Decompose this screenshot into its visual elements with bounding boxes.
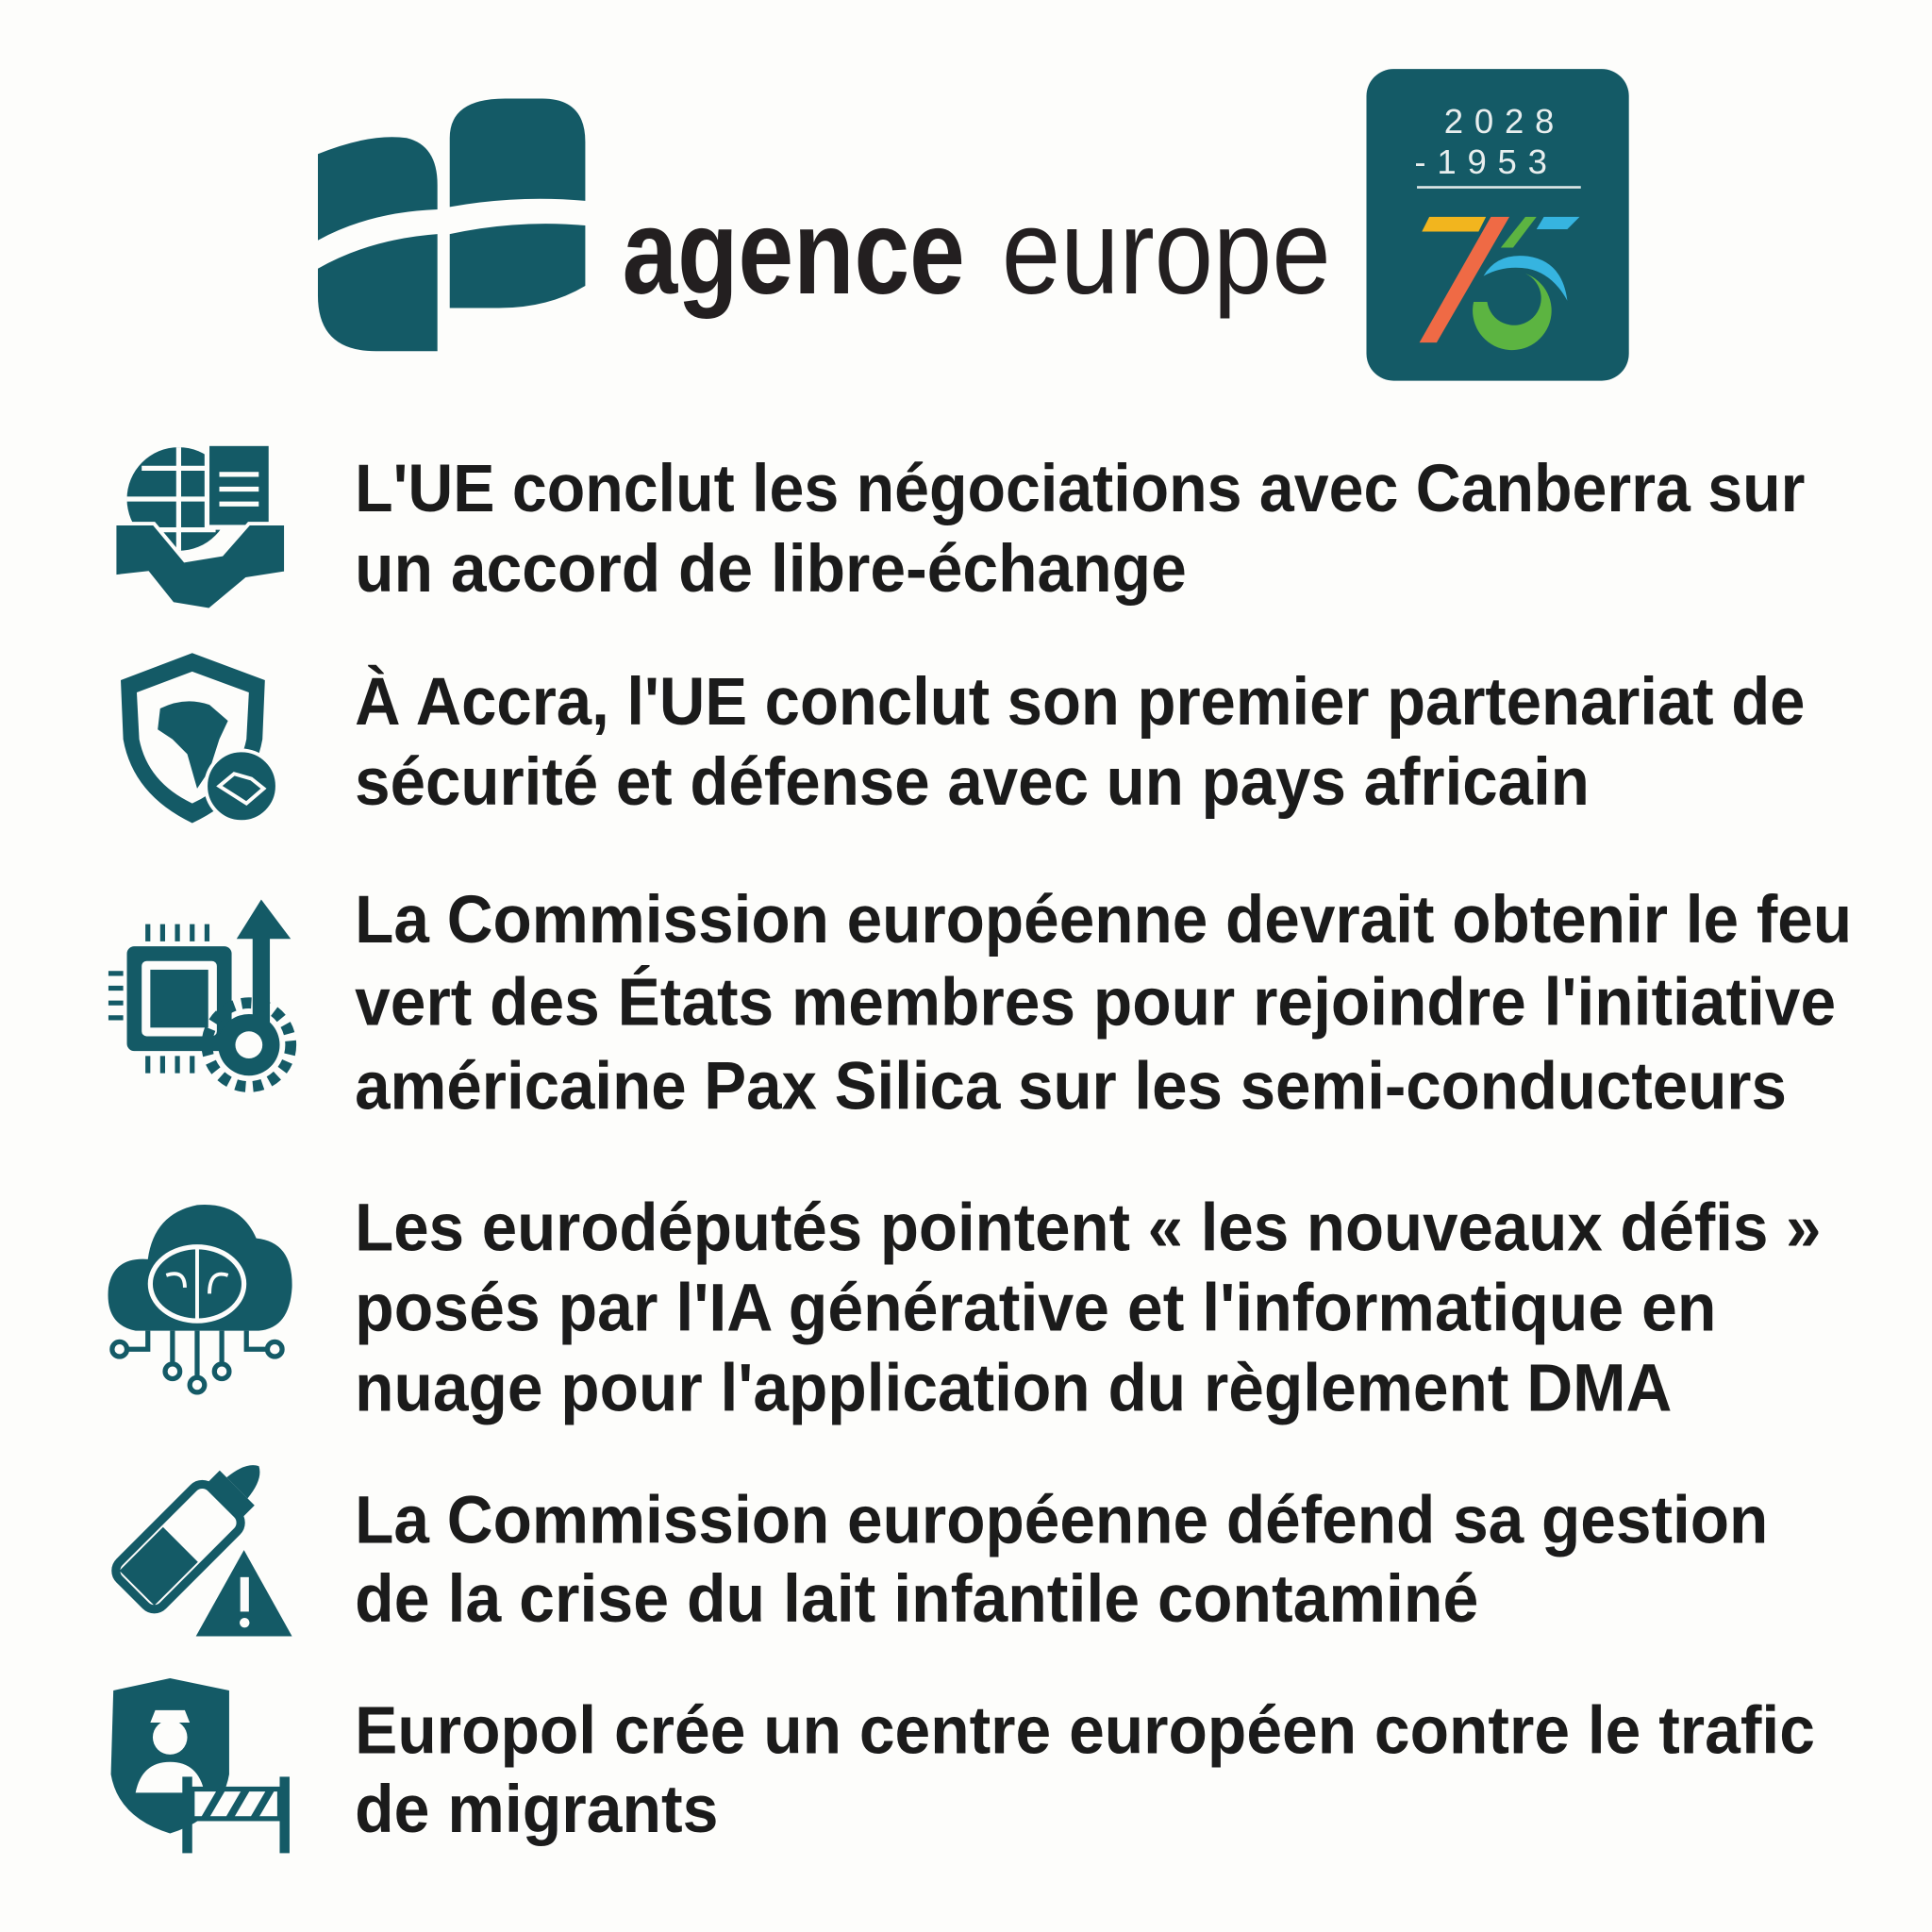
badge 75 years: 2028 (1444, 102, 1565, 141)
item 3 (108, 882, 1852, 1124)
headline 4: nuage pour l'application du règlement DMA (355, 1351, 1672, 1426)
badge 75 years: -1953 (1414, 142, 1558, 181)
item 5 (110, 1444, 1768, 1637)
headline 4: posés par l'IA générative et l'informatique en (355, 1271, 1716, 1346)
headline 5: La Commission européenne défend sa gestion (355, 1482, 1768, 1557)
logo wordmark: europe (1002, 185, 1331, 320)
headline 1: L'UE conclut les négociations avec Canberra sur (355, 451, 1805, 526)
headline 5: de la crise du lait infantile contaminé (355, 1561, 1478, 1637)
headline 2: À Accra, l'UE conclut son premier partenariat de (355, 664, 1805, 740)
icon: shield africa (121, 653, 277, 823)
headline 3: La Commission européenne devrait obtenir le feu (355, 882, 1852, 958)
item 1 (114, 443, 1805, 610)
headline 3: vert des États membres pour rejoindre l'initiative (355, 965, 1836, 1041)
headline 4: Les eurodéputés pointent « les nouveaux défis » (355, 1191, 1821, 1266)
headline 2: sécurité et défense avec un pays africain (355, 744, 1590, 820)
headline 1: un accord de libre-échange (355, 531, 1187, 607)
badge 75 years (1366, 69, 1629, 381)
headline 6: de migrants (355, 1772, 718, 1847)
headline 3: américaine Pax Silica sur les semi-conducteurs (355, 1049, 1787, 1124)
logo wordmark: agence (623, 185, 965, 320)
item 6 (111, 1678, 1815, 1853)
item 2 (121, 653, 1805, 823)
icon: globe document handshake (114, 443, 286, 610)
icon: cloud brain circuit (108, 1205, 292, 1392)
icon: chip arrow gear (108, 899, 291, 1087)
headline 6: Europol crée un centre européen contre le trafic (355, 1693, 1815, 1769)
icon: baby bottle warning (110, 1444, 292, 1637)
icon: police badge barrier (111, 1678, 290, 1853)
item 4 (108, 1191, 1821, 1426)
logo mark (318, 98, 585, 351)
